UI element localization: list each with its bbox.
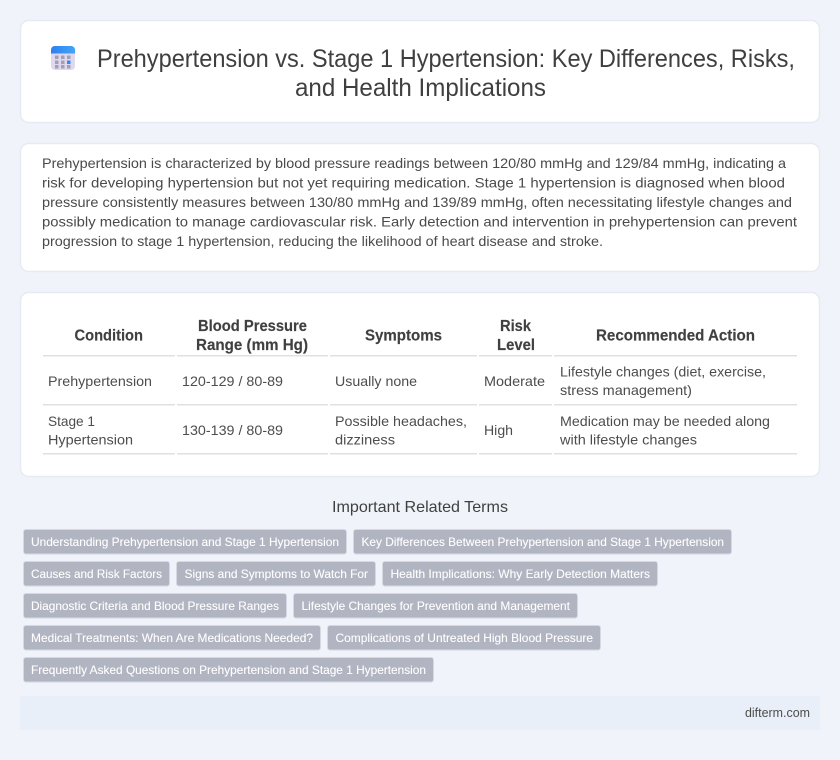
table row: stage 1 hypertension: Medication may be needed along <box>560 413 770 429</box>
table row: prehypertension <box>48 364 766 398</box>
chip: Diagnostic Criteria and Blood Pressure Ranges <box>31 599 279 613</box>
text block: definition: pressure consistently measures between 130/80 mmHg and 139/89 mmHg, often necessitating lifestyle changes and <box>42 194 792 210</box>
chip: Signs and Symptoms to Watch For <box>184 567 368 581</box>
related term chips <box>24 530 732 682</box>
table row: stage 1 hypertension <box>48 413 770 448</box>
chip: Understanding Prehypertension and Stage 1 Hypertension <box>31 535 339 549</box>
table row: stage 1 hypertension: Possible headaches, <box>335 413 467 429</box>
chip: Causes and Risk Factors <box>31 567 162 581</box>
table row: prehypertension: Usually none <box>335 373 417 389</box>
chip: Key Differences Between Prehypertension and Stage 1 Hypertension <box>362 535 724 549</box>
table header row: Level <box>497 337 535 354</box>
chip <box>294 594 578 618</box>
table header row: Range (mm Hg) <box>196 337 308 354</box>
chip: Health Implications: Why Early Detection Matters <box>390 567 650 581</box>
table row: stage 1 hypertension: Hypertension <box>48 432 133 448</box>
table header row: Blood Pressure <box>198 318 307 335</box>
table row: stage 1 hypertension: with lifestyle changes <box>559 432 697 448</box>
panel: title header <box>20 20 820 122</box>
chip: Medical Treatments: When Are Medications Needed? <box>31 631 313 645</box>
table header row: Symptoms <box>365 328 442 344</box>
heading: important related terms: Important Related Terms <box>332 499 508 516</box>
title: Prehypertension vs. Stage 1 Hypertension: Key Differences, Risks, <box>97 45 795 73</box>
table header row <box>74 318 755 354</box>
panel: introduction paragraph <box>20 144 820 272</box>
table header row: Recommended Action <box>596 328 755 344</box>
table row: stage 1 hypertension: dizziness <box>335 432 395 448</box>
panel: comparison table <box>20 292 820 476</box>
text block: definition: possibly medication to manage cardiovascular risk. Early detection and intervention in prehypertension can prevent <box>42 214 797 230</box>
chip: Complications of Untreated High Blood Pressure <box>336 631 593 645</box>
chip <box>24 530 346 554</box>
table row: prehypertension: Moderate <box>484 373 545 389</box>
chip: Frequently Asked Questions on Prehypertension and Stage 1 Hypertension <box>31 663 426 677</box>
table header row: Condition <box>74 328 143 344</box>
text block: definition: Prehypertension is characterized by blood pressure readings between 120/80 mmHg and 129/84 mmHg, indicating a <box>42 155 786 171</box>
table row: prehypertension: 120-129 / 80-89 <box>182 373 283 389</box>
table row: prehypertension: stress management) <box>560 382 692 398</box>
chip <box>354 530 732 554</box>
table row: stage 1 hypertension: 130-139 / 80-89 <box>182 422 283 438</box>
table row: stage 1 hypertension: Stage 1 <box>48 413 95 429</box>
table row: stage 1 hypertension: High <box>484 422 513 438</box>
footer bar <box>20 696 820 730</box>
table row: prehypertension: Lifestyle changes (diet, exercise, <box>560 364 766 380</box>
chip <box>176 562 376 586</box>
text block: definition: risk for developing hypertension but not yet requiring medication. Stage 1 hypertension is diagnosed when blood <box>42 174 785 190</box>
text block: definition: progression to stage 1 hypertension, reducing the likelihood of heart disease and stroke. <box>42 233 603 249</box>
footer source: difterm.com <box>745 706 810 720</box>
chip: Lifestyle Changes for Prevention and Management <box>302 599 571 613</box>
chip <box>382 562 658 586</box>
title <box>97 45 795 102</box>
table row: prehypertension: Prehypertension <box>48 373 152 389</box>
chip <box>24 594 286 618</box>
chip <box>24 658 434 682</box>
chip <box>24 626 320 650</box>
title: and Health Implications <box>295 74 546 102</box>
table header row: Risk <box>500 318 531 335</box>
icon: calendar <box>51 46 75 70</box>
chip <box>328 626 600 650</box>
text block: definition <box>42 155 797 249</box>
chip <box>24 562 170 586</box>
